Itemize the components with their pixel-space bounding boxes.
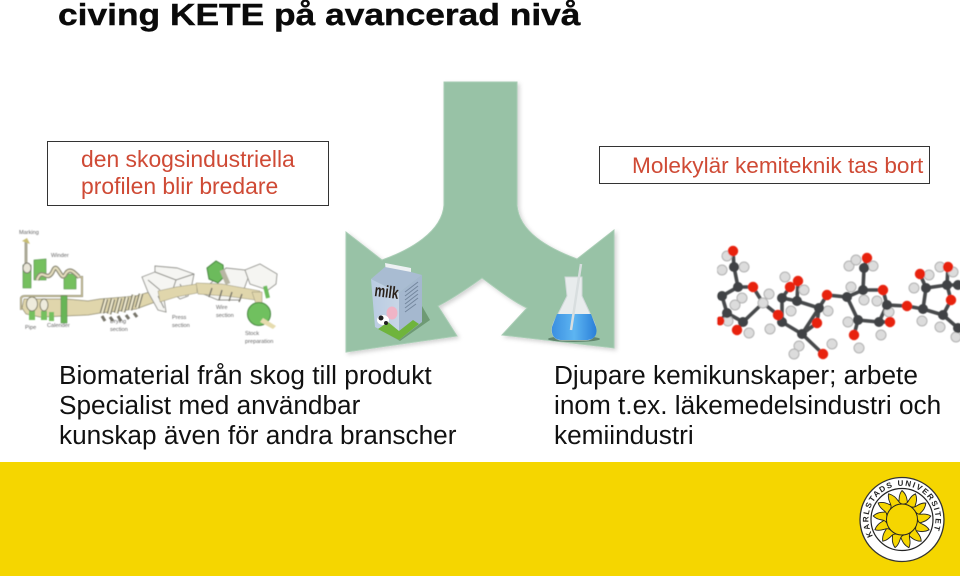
illustration: paper machine: Press (172, 315, 187, 321)
illustration: paper machine: Stock (245, 331, 259, 337)
text: deeper chemistry (554, 360, 941, 450)
illustration: paper machine: section (172, 323, 190, 329)
motors (207, 261, 224, 283)
branching arrow (346, 82, 614, 352)
illustration: paper machine: Calender (47, 323, 70, 329)
winder (23, 259, 76, 289)
callout: molecular chemistry removed (599, 146, 930, 184)
text: biomaterial: Biomaterial från skog till produkt (59, 360, 432, 390)
icon: lab flask (548, 264, 600, 342)
logo: Karlstads universitet: KARLSTADS UNIVERSITET (862, 480, 942, 538)
press section (142, 266, 194, 312)
text: deeper chemistry: inom t.ex. läkemedelsindustri och (554, 390, 941, 420)
icon: milk carton (371, 263, 430, 341)
text: biomaterial: kunskap även för andra branscher (59, 420, 456, 450)
footer band (0, 462, 960, 576)
illustration: cellulose molecule (700, 240, 960, 365)
illustration: paper machine: Winder (51, 253, 69, 259)
illustration: paper machine: preparation (245, 339, 273, 345)
callout: profile broadens: den skogsindustriella (81, 146, 295, 172)
callout: molecular chemistry removed: Molekylär kemiteknik tas bort (632, 153, 923, 178)
illustration: paper machine: Wire (216, 305, 228, 311)
text: biomaterial: Specialist med användbar (59, 390, 360, 420)
illustration: paper machine: Drying (110, 319, 126, 325)
callout: profile broadens (47, 141, 329, 206)
illustration: paper machine (19, 230, 277, 345)
illustration: paper machine: Marking (19, 230, 39, 236)
illustration: paper machine: section (216, 313, 234, 319)
web path (21, 277, 82, 310)
illustration: paper machine: section (110, 327, 128, 333)
illustration: paper machine: Pipe (25, 325, 36, 331)
text: biomaterial (59, 360, 456, 450)
callout: profile broadens: profilen blir bredare (81, 173, 278, 199)
text: deeper chemistry: Djupare kemikunskaper; arbete (554, 360, 918, 390)
calender (29, 308, 54, 321)
text: deeper chemistry: kemiindustri (554, 420, 694, 450)
drying section (102, 294, 141, 314)
wire section (201, 268, 248, 300)
icon: milk carton: milk (374, 281, 400, 303)
